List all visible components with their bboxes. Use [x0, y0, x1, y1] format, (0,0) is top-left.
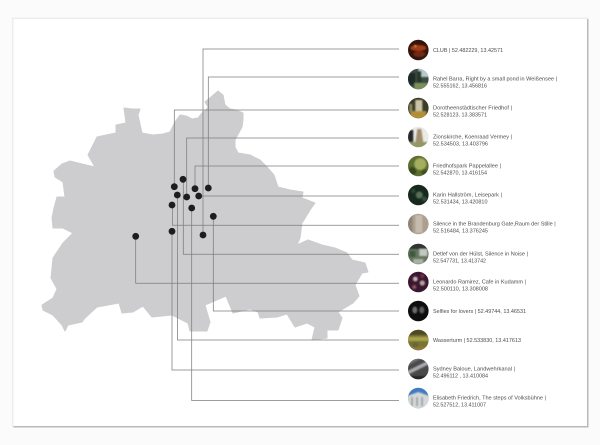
label: Dorotheenstädtischer Friedhof: 52.528123, 13.383571: [433, 112, 487, 118]
label: Dorotheenstädtischer Friedhof: [433, 106, 512, 118]
label: Karin Hallström: Karin Hallström, Leisepark |: [433, 193, 502, 199]
photo: Sydney Baloue: [407, 358, 429, 380]
photo: Selfies for lovers: [407, 300, 429, 322]
photo: Silence in the Brandenburg Gate: [407, 213, 429, 235]
photo: Detlef von der Hülst: [407, 243, 429, 265]
photo: Dorotheenstädtischer Friedhof: [407, 97, 429, 119]
photo: Elisabeth Friedrich: [407, 387, 429, 409]
label: Detlef von der Hülst: [433, 252, 528, 264]
label: Elisabeth Friedrich: Elisabeth Friedrich, The steps of Volksbühne |: [433, 396, 546, 402]
label: Selfies for lovers: Selfies for lovers | 52.49744, 13.46531: [433, 309, 526, 315]
photo: Friedhofspark Pappelallee: [407, 155, 429, 177]
label: Detlef von der Hülst: 52.547731, 13.413742: [433, 258, 486, 264]
photo: Zionskirche: [408, 126, 428, 148]
label: Silence in the Brandenburg Gate: 52.516484, 13.376245: [433, 228, 488, 234]
label: Karin Hallström: 52.531434, 13.420810: [433, 199, 488, 205]
label: Leonardo Ramirez: Leonardo Ramirez, Cafe in Kudamm |: [433, 280, 526, 286]
label: Silence in the Brandenburg Gate: Silence in the Brandenburg Gate,Raum der Stille |: [433, 222, 556, 228]
label: Sydney Baloue: 52.496112 , 13.410084: [433, 373, 488, 379]
label: Friedhofspark Pappelallee: Friedhofspark Pappelallee |: [433, 164, 501, 170]
label: Leonardo Ramirez: [433, 280, 526, 292]
photo: Wasserturm: [407, 329, 429, 351]
connector lines: [136, 49, 399, 400]
label: Wasserturm: Wasserturm | 52.533830, 13.417613: [433, 338, 521, 344]
label: Rahel Barra: 52.555162, 13.456816: [433, 83, 487, 89]
label: Rahel Barra: Rahel Barra, Right by a small pond in Weißensee |: [433, 77, 557, 83]
label: Rahel Barra: [433, 77, 557, 89]
map: Berlin silhouette: [42, 91, 368, 340]
label: Elisabeth Friedrich: [433, 396, 546, 408]
label: Silence in the Brandenburg Gate: [433, 222, 556, 234]
label: Sydney Baloue: Sydney Baloue, Landwehrkanal |: [433, 367, 515, 373]
label: club: CLUB | 52.482229, 13.42571: [433, 48, 503, 54]
label: Detlef von der Hülst: Detlef von der Hülst, Silence in Noise |: [433, 252, 528, 258]
label: Elisabeth Friedrich: 52.527512, 13.411007: [433, 402, 486, 408]
photo: Rahel Barra: [408, 68, 429, 90]
label: Friedhofspark Pappelallee: [433, 164, 501, 176]
label: Zionskirche: 52.534503, 13.403796: [433, 141, 488, 147]
label: Zionskirche: Zionskirche, Koenraad Vermey |: [433, 135, 512, 141]
label: Dorotheenstädtischer Friedhof: Dorotheenstädtischer Friedhof |: [433, 106, 512, 112]
label: Sydney Baloue: [433, 367, 515, 379]
label: Zionskirche: [433, 135, 512, 147]
label: Karin Hallström: [433, 193, 502, 205]
photo: Karin Hallström: [407, 184, 429, 206]
location dots: [132, 176, 217, 240]
photo: club: [407, 39, 429, 61]
photo: Leonardo Ramirez: [407, 271, 429, 293]
label: Leonardo Ramirez: 52.500110, 13.308008: [433, 286, 488, 292]
label: Friedhofspark Pappelallee: 52.542870, 13.416154: [433, 170, 487, 176]
